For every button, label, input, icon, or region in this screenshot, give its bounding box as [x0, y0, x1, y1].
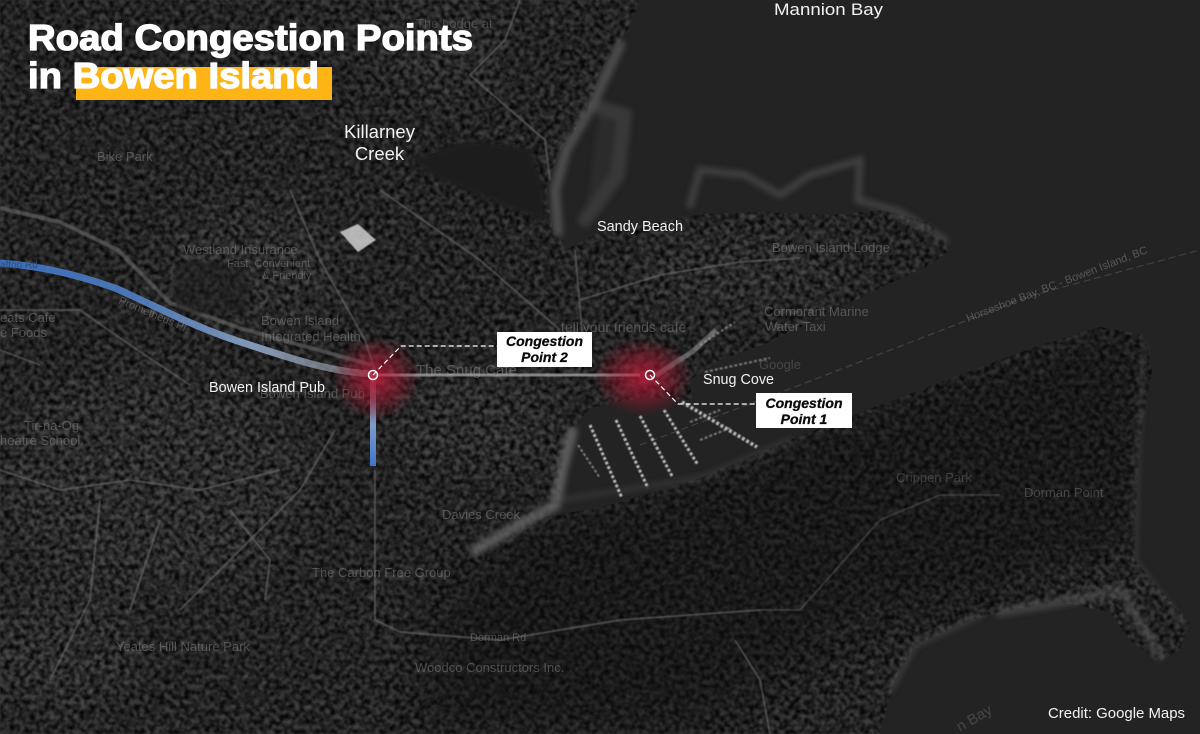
faint map labels: The Lodge at — [416, 16, 493, 31]
callout: congestion point 1 — [756, 393, 852, 428]
title — [28, 17, 473, 96]
faint map labels: The Carbon Free Group — [312, 565, 451, 580]
ferry route — [640, 250, 1200, 445]
faint map labels: The Snug Cafe — [416, 362, 517, 379]
congestion glow 1 — [593, 337, 693, 417]
marina docks — [578, 322, 770, 498]
callout: congestion point 2: Point 2 — [521, 349, 568, 365]
faint map labels: Cormorant Marine — [764, 304, 869, 319]
callout: congestion point 2: Congestion — [506, 333, 583, 349]
place label: Killarney Creek: Creek — [355, 143, 405, 164]
faint map labels: Water Taxi — [765, 319, 826, 334]
leader line: congestion point 2 — [373, 346, 497, 375]
faint map labels: Bike Park — [97, 149, 153, 164]
faint map labels: tell your friends cafe — [561, 319, 686, 335]
faint map labels: Westland Insurance — [183, 242, 298, 257]
faint map labels: Yeates Hill Nature Park — [116, 639, 250, 654]
leader line: congestion point 1 — [650, 375, 756, 404]
faint map labels: & Friendly — [262, 270, 312, 282]
faint map labels: Prometheus Pl — [117, 295, 188, 334]
traffic road: Grafton Road in blue: afton Rd — [0, 260, 38, 271]
bright rooftops — [340, 224, 376, 252]
faint map labels: Horseshoe Bay, BC - Bowen Island, BC — [965, 244, 1149, 325]
traffic road: Grafton Road in blue — [0, 260, 372, 374]
faint map labels: Dorman Rd — [470, 632, 526, 644]
Killarney Lake — [408, 140, 545, 222]
faint map labels: heatre School — [0, 433, 80, 448]
faint map labels: Woodco Constructors Inc. — [415, 660, 564, 675]
place label: Sandy Beach: Sandy Beach — [597, 219, 683, 235]
faint map labels: eats Cafe — [0, 310, 56, 325]
marker: congestion point 1 — [646, 370, 654, 380]
faint map labels: Bowen Island — [261, 313, 339, 328]
title: Road Congestion Points — [28, 17, 473, 58]
place label: Mannion Bay: Mannion Bay — [774, 0, 884, 19]
faint map labels: Davies Creek — [442, 507, 521, 522]
faint map labels: Crippen Park — [896, 470, 972, 485]
place label: Killarney Creek — [344, 121, 416, 164]
traffic road: The Snug Cafe section in grey — [372, 374, 640, 376]
faint map labels: Google — [759, 357, 801, 372]
title: in Bowen Island — [28, 55, 319, 96]
faint map labels: Fast, Convenient — [227, 258, 310, 270]
faint map labels: Bowen Island Pub — [260, 386, 365, 401]
place label: Bowen Island Pub: Bowen Island Pub — [209, 380, 325, 396]
credit: Credit: Google Maps — [1048, 706, 1185, 722]
faint map labels: e Foods — [0, 325, 47, 340]
road stub near Snug Cove — [655, 330, 716, 376]
place label: Killarney Creek: Killarney — [344, 121, 416, 142]
callout: congestion point 2 — [497, 332, 592, 367]
dark forest on the south peninsula — [420, 327, 1145, 734]
callout: congestion point 1: Congestion — [766, 395, 842, 411]
title highlight bar — [76, 67, 332, 100]
marker: congestion point 2 — [368, 370, 378, 380]
faint map labels: Dorman Point — [1024, 485, 1104, 500]
congestion glow 2 — [332, 336, 420, 420]
faint map labels: Integrated Health — [261, 329, 361, 344]
place label: Snug Cove: Snug Cove — [703, 372, 774, 388]
faint map labels: Tir-na-Og — [24, 418, 79, 433]
callout: congestion point 1: Point 1 — [781, 411, 828, 427]
shoreline sand — [475, 45, 1185, 690]
faint map labels: Bowen Island Lodge — [772, 240, 890, 255]
traffic road: south branch in blue — [370, 376, 376, 466]
